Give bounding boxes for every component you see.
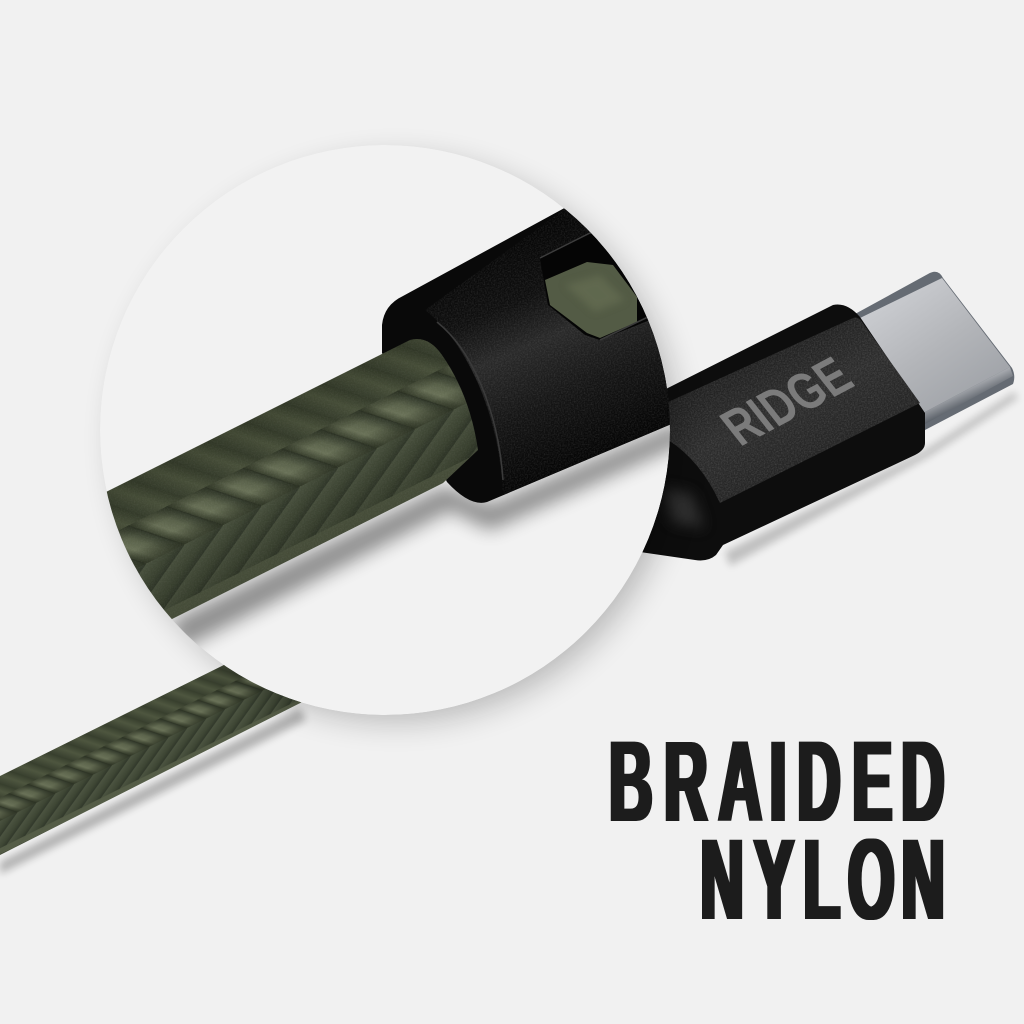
hex window <box>540 232 648 340</box>
heading: braided nylon <box>609 718 945 944</box>
heading line 1: BRAIDED <box>609 718 945 846</box>
metal plug <box>855 272 1014 430</box>
magnifier circle <box>100 145 670 715</box>
small braided cable <box>0 657 320 874</box>
USB-C connector <box>640 272 1018 566</box>
black housing <box>640 304 925 560</box>
strain relief collar <box>382 208 670 503</box>
circle shadow <box>115 159 677 721</box>
heading line 2: NYLON <box>700 816 945 944</box>
connector shadow <box>725 392 1018 566</box>
collar face <box>452 208 670 495</box>
RIDGE logo: RIDGE <box>709 346 864 456</box>
shadows under cable and collar <box>170 422 690 650</box>
braided cable close-up <box>106 339 478 619</box>
